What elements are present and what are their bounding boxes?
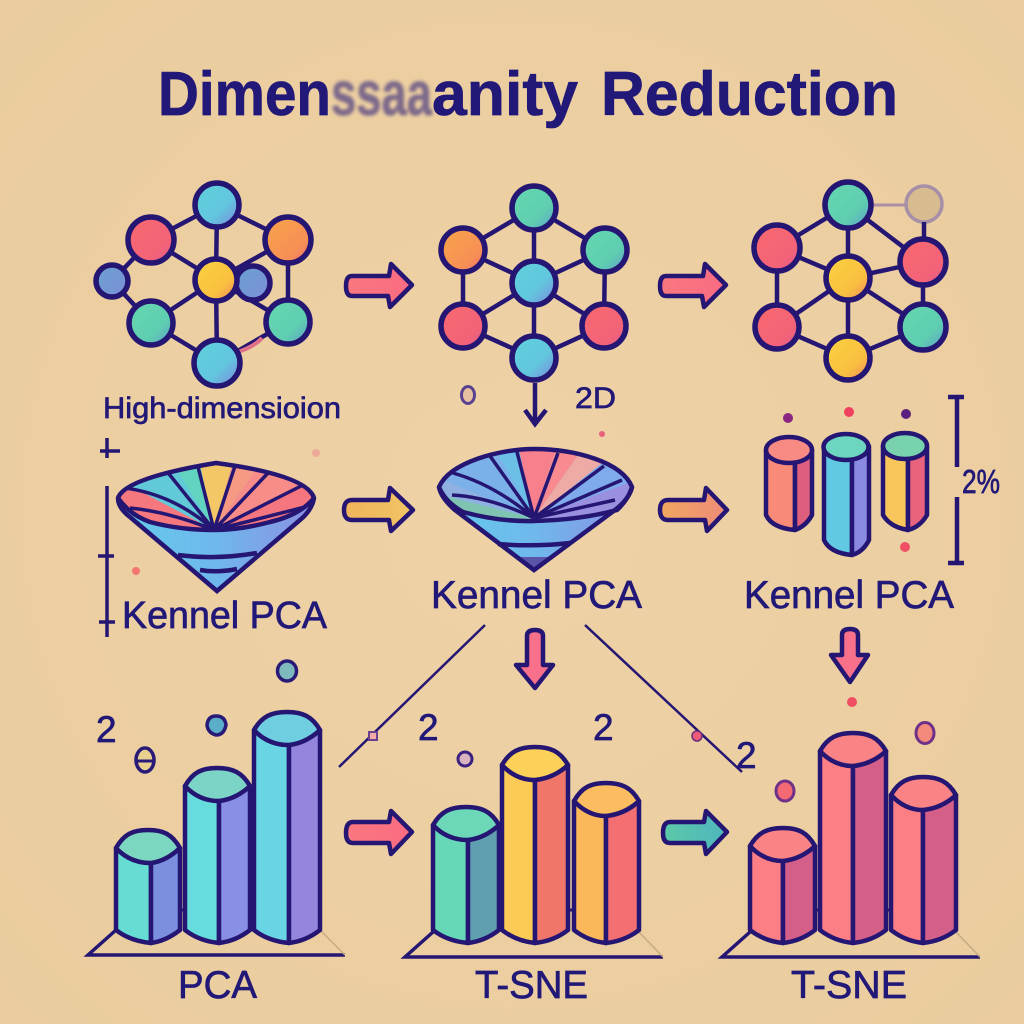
title: [158, 60, 898, 129]
label: number 2 right: 2: [736, 735, 757, 776]
title: Dimen: [158, 60, 331, 129]
label: number 2 centre right: 2: [593, 707, 614, 748]
network: second graph: [441, 186, 627, 380]
label: number 2 centre left: 2: [418, 707, 439, 748]
label: T-SNE right: T-SNE: [791, 964, 907, 1007]
line: diagonal left: [339, 625, 485, 767]
dots: pale pink markers: [132, 431, 605, 575]
markers: PCA dots: [136, 661, 296, 772]
label: T-SNE middle: T-SNE: [475, 964, 588, 1007]
dots: above cylinders: [783, 407, 911, 552]
cylinder 1: [766, 437, 812, 530]
label: PCA: PCA: [178, 964, 257, 1007]
label: Kennel PCA middle: Kennel PCA: [431, 574, 642, 617]
bar 3: [574, 783, 639, 943]
label: number 2 far left: 2: [96, 709, 117, 750]
label: Kennel PCA right: Kennel PCA: [744, 574, 954, 617]
arrow: row 1 first: [346, 264, 412, 307]
cylinders: kernel PCA: [766, 433, 927, 555]
label: 2%: 2%: [962, 463, 1000, 500]
title: anity: [432, 60, 579, 129]
cylinder 2: [824, 434, 869, 555]
cone: middle: [436, 446, 634, 573]
bar 2: [502, 747, 568, 943]
label: high-dimension: High-dimensioion: [103, 392, 341, 425]
arrow: row 2 first: [344, 488, 413, 531]
cylinder 3: [883, 433, 927, 530]
network: high-dimensional graph: [96, 183, 311, 386]
axis: left scale: [98, 438, 120, 637]
bracket: scale: [948, 397, 964, 563]
network: third graph: [754, 182, 946, 380]
title: Reduction: [601, 60, 898, 129]
cone: left: [116, 460, 316, 594]
bar 1: [116, 830, 180, 943]
bar chart: PCA: [88, 712, 345, 955]
arrow: down right: [831, 629, 868, 682]
markers: T-SNE dots: [458, 697, 934, 801]
arrow: row 1 second: [660, 264, 726, 307]
bar 3: [254, 712, 320, 943]
marker: small oval: [462, 386, 474, 404]
bar 2: [820, 733, 886, 943]
bar 1: [750, 828, 815, 943]
arrow: row 2 second: [660, 488, 727, 531]
bar chart: T-SNE middle: [405, 747, 663, 957]
bar 1: [433, 807, 499, 943]
bar 3: [891, 777, 956, 943]
label: 2D: 2D: [575, 382, 616, 415]
label: Kennel PCA left: Kennel PCA: [122, 594, 327, 636]
arrow: row 3 second: [663, 811, 727, 854]
arrow: down middle: [516, 630, 553, 688]
bar 2: [185, 768, 250, 943]
arrow: thin down to cone: [525, 383, 546, 424]
arrow: row 3 first: [346, 811, 412, 854]
title: ssaa: [331, 60, 432, 129]
line: diagonal right: [585, 625, 742, 772]
bar chart: T-SNE right: [722, 733, 980, 957]
